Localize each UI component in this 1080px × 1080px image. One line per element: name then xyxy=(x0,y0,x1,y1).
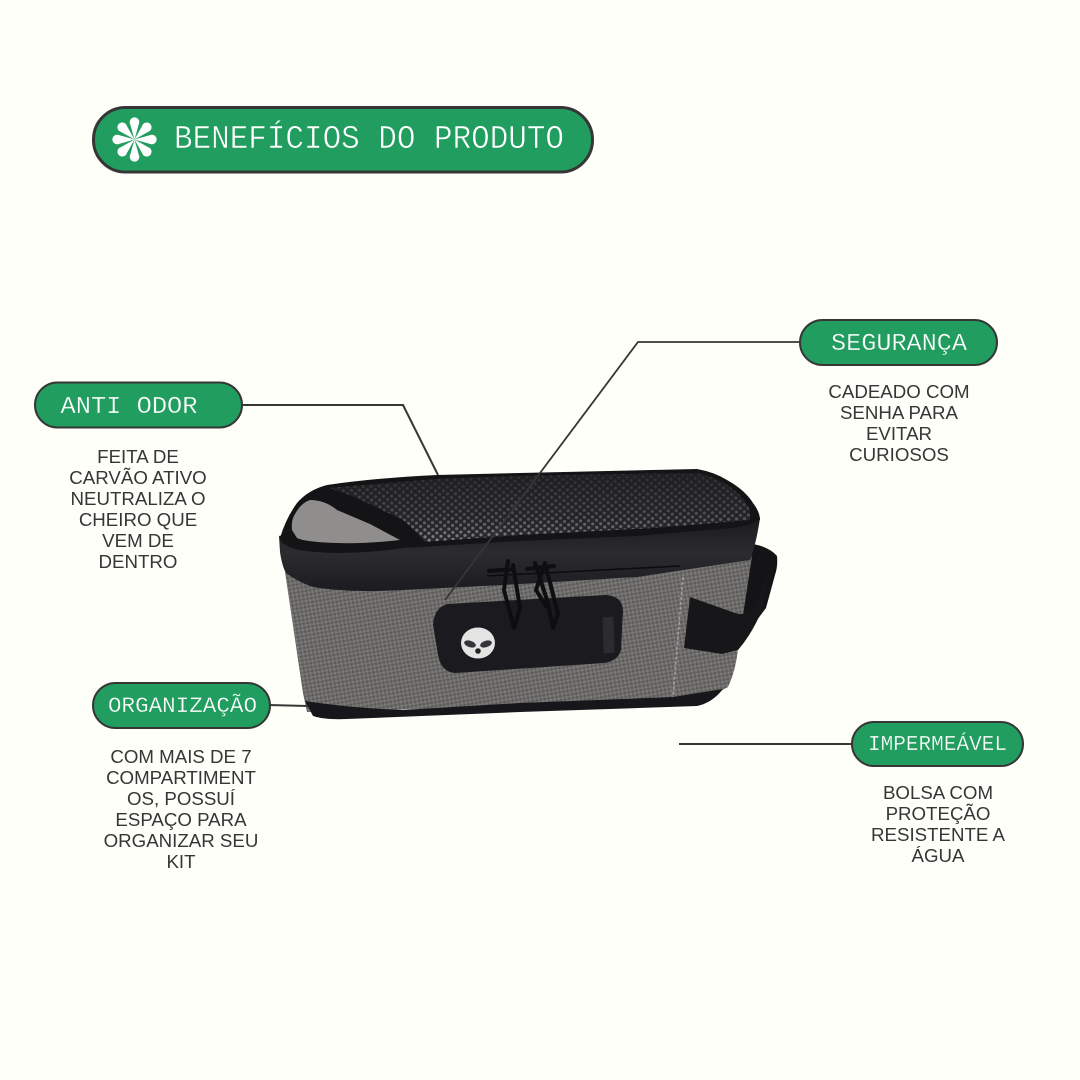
description: DENTRO xyxy=(99,551,177,572)
lid mesh xyxy=(330,473,750,542)
callout: segurança xyxy=(445,320,997,600)
lid band xyxy=(279,515,760,591)
title badge xyxy=(94,108,592,172)
leader line xyxy=(445,342,802,600)
description: EVITAR xyxy=(866,423,932,444)
description: CARVÃO ATIVO xyxy=(69,467,207,488)
description: BOLSA COM xyxy=(883,782,993,803)
combination lock xyxy=(433,561,623,673)
zipper seam xyxy=(487,566,680,576)
zipper pulls xyxy=(489,561,558,628)
label text: SEGURANÇA xyxy=(831,331,968,358)
description: ORGANIZAR SEU xyxy=(104,830,258,851)
callout: organização xyxy=(93,683,308,872)
label pill xyxy=(35,382,242,428)
label pill xyxy=(93,683,270,728)
callout: impermeável xyxy=(679,722,1023,866)
description: ÁGUA xyxy=(912,845,965,866)
icon: white flower xyxy=(112,117,157,162)
description: RESISTENTE A xyxy=(871,824,1006,845)
description: FEITA DE xyxy=(97,446,179,467)
description: OS, POSSUÍ xyxy=(127,788,236,809)
description: COMPARTIMENT xyxy=(106,767,256,788)
leader line xyxy=(268,705,308,706)
description: SENHA PARA xyxy=(840,402,959,423)
leader line xyxy=(679,743,853,745)
product: travel bag xyxy=(35,320,1023,872)
back strap xyxy=(735,543,777,625)
description: VEM DE xyxy=(102,530,174,551)
callout: anti odor xyxy=(35,382,438,572)
description: COM MAIS DE 7 xyxy=(110,746,252,767)
side panel seam xyxy=(673,577,683,697)
description: PROTEÇÃO xyxy=(886,803,990,824)
icon: sloth face xyxy=(461,628,495,658)
bag body xyxy=(285,556,752,712)
description: CURIOSOS xyxy=(849,444,949,465)
label text: ANTI ODOR xyxy=(60,394,198,421)
description: KIT xyxy=(166,851,196,872)
label text: ORGANIZAÇÃO xyxy=(108,693,257,719)
title text: BENEFÍCIOS DO PRODUTO xyxy=(174,120,564,158)
label text: IMPERMEÁVEL xyxy=(868,733,1007,757)
label pill xyxy=(852,722,1023,766)
label pill xyxy=(800,320,997,365)
grey lid corner xyxy=(292,500,400,543)
bottom trim xyxy=(305,689,723,719)
description: ESPAÇO PARA xyxy=(115,809,247,830)
leader line xyxy=(240,405,438,475)
front strap xyxy=(684,570,770,654)
description: CHEIRO QUE xyxy=(79,509,197,530)
description: NEUTRALIZA O xyxy=(70,488,206,509)
lid top xyxy=(280,469,760,553)
description: CADEADO COM xyxy=(828,381,970,402)
